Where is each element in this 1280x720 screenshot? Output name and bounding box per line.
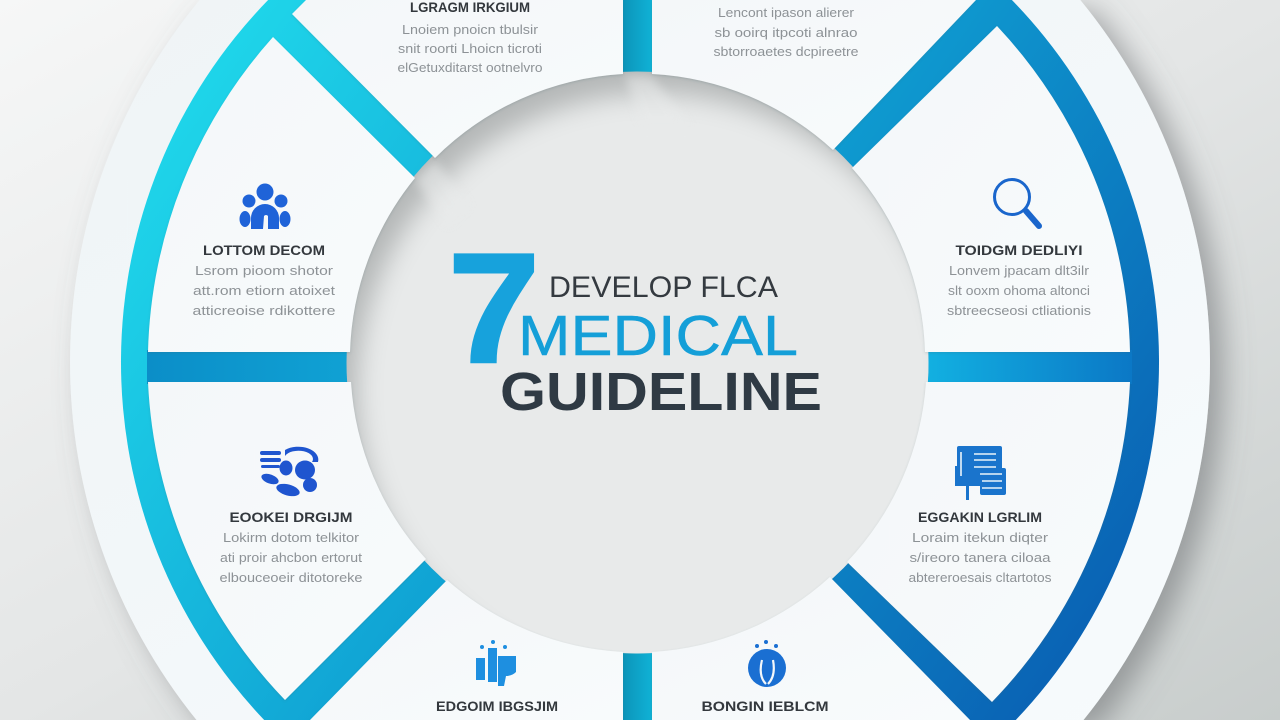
- body text: right upper: Lonvem jpacam dlt3ilr: [949, 263, 1090, 278]
- body text: top right: sbtorroaetes dcpireetre: [714, 44, 858, 59]
- body text: top left: snit roorti Lhoicn ticroti: [398, 41, 542, 56]
- body text: left lower: Lokirm dotom telkitor: [223, 530, 360, 545]
- panel: top right: [652, 0, 976, 150]
- panel: left upper: [148, 37, 415, 352]
- icon: people group: [240, 184, 290, 229]
- title line: guideline: GUIDELINE: [500, 362, 822, 422]
- body text: top left: [398, 22, 542, 75]
- heading: bottom right: BONGIN IEBLCM: [702, 698, 828, 714]
- title line: medical: MEDICAL: [518, 304, 798, 368]
- body text: top right: Lencont ipason alierer: [718, 5, 855, 20]
- icon: magnifier: [994, 180, 1039, 226]
- body text: right lower: s/ireoro tanera ciloaa: [910, 550, 1051, 565]
- heading: left upper: LOTTOM DECOM: [203, 242, 325, 258]
- body text: left upper: [192, 263, 336, 318]
- icon: organ cluster: [260, 447, 318, 498]
- body text: left lower: ati proir ahcbon ertorut: [220, 550, 362, 565]
- heading: right upper: TOIDGM DEDLIYI: [956, 242, 1082, 258]
- body text: right lower: Loraim itekun diqter: [912, 530, 1049, 545]
- heading: right lower: EGGAKIN LGRLIM: [918, 509, 1042, 525]
- icon: medical figures: [476, 640, 516, 686]
- panel: top left: [292, 0, 623, 158]
- body text: top left: elGetuxditarst ootnelvro: [398, 60, 542, 75]
- separator bands: [147, 0, 1132, 720]
- body text: left upper: att.rom etiorn atoixet: [193, 283, 335, 298]
- body text: right lower: abtereroesais cltartotos: [908, 570, 1052, 585]
- panel: left lower: [148, 382, 426, 700]
- body text: right upper: slt ooxm ohoma altonci: [948, 283, 1090, 298]
- center disk: [346, 72, 928, 654]
- body text: right upper: [947, 263, 1092, 318]
- body text: right lower: [908, 530, 1052, 585]
- body text: left lower: elbouceoeir ditotoreke: [220, 570, 362, 585]
- icon: document chart: [955, 446, 1006, 500]
- body text: left lower: [220, 530, 362, 585]
- title line: develop: DEVELOP FLCA: [549, 271, 778, 304]
- panel: right upper: [852, 26, 1130, 352]
- heading: left lower: EOOKEI DRGIJM: [230, 509, 352, 525]
- panel: bottom right: [652, 577, 970, 720]
- body text: top right: sb ooirq itpcoti alnrao: [714, 25, 858, 40]
- numeral 7: 7: [448, 222, 540, 396]
- body text: right upper: sbtreecseosi ctliationis: [947, 303, 1092, 318]
- panel: right lower: [847, 382, 1130, 702]
- title block: [448, 222, 822, 422]
- icon: globe with sparks: [748, 640, 786, 687]
- panel: bottom left: [310, 580, 623, 720]
- body text: top left: Lnoiem pnoicn tbulsir: [402, 22, 539, 37]
- heading: bottom left: EDGOIM IBGSJIM: [436, 698, 558, 714]
- body text: top right: [714, 5, 858, 59]
- body text: left upper: Lsrom pioom shotor: [195, 263, 334, 278]
- body text: left upper: atticreoise rdikottere: [192, 303, 336, 318]
